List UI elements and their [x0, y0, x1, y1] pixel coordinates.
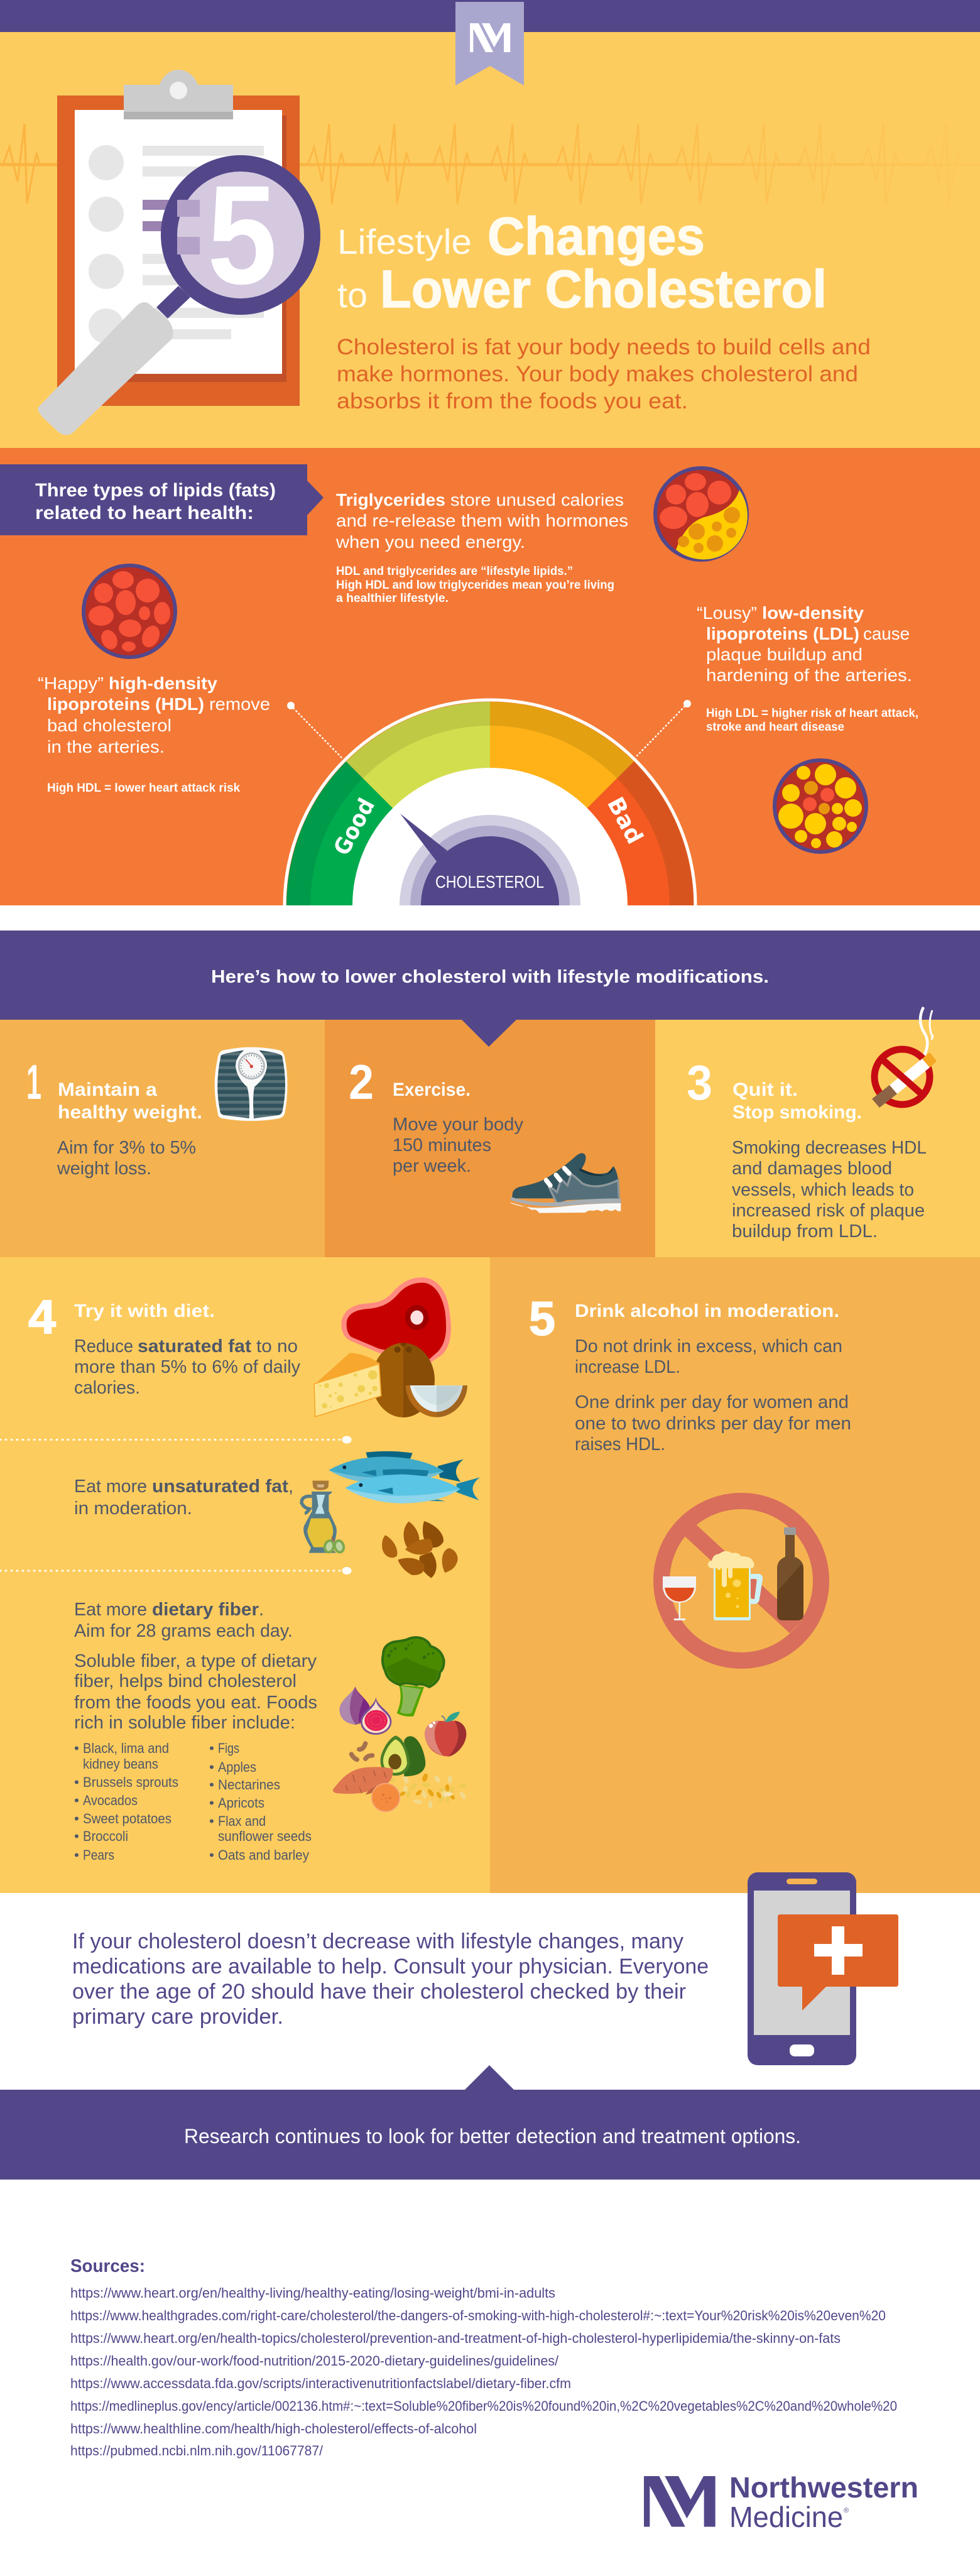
step 3	[687, 1055, 927, 1242]
icon: no alcohol	[662, 1501, 821, 1661]
soluble fiber foods list: Flax and	[218, 1813, 266, 1829]
step 2: per week.	[393, 1156, 471, 1176]
unsaturated fat text: ,	[288, 1476, 293, 1497]
title: to	[337, 275, 368, 315]
step 2: Exercise.	[393, 1079, 471, 1100]
step 3: buildup from LDL.	[732, 1221, 878, 1242]
soluble fiber foods list: Apricots	[218, 1795, 264, 1811]
soluble fiber foods list: •	[74, 1811, 79, 1826]
sources: https://www.heart.org/en/healthy-living/healthy-eating/losing-weight/bmi-in-adults	[70, 2285, 555, 2301]
soluble fiber foods list: Oats and barley	[218, 1847, 310, 1863]
dietary fiber text: Soluble fiber, a type of dietary	[74, 1651, 317, 1671]
step 4 header and text: to no	[256, 1336, 298, 1356]
step 3: Stop smoking.	[732, 1102, 862, 1123]
HDL text: high-density	[109, 674, 218, 693]
step 2: Move your body	[393, 1115, 524, 1135]
intro text: absorbs it from the foods you eat.	[337, 388, 688, 413]
soluble fiber foods list: •	[74, 1847, 79, 1863]
triglycerides text: a healthier lifestyle.	[336, 592, 449, 605]
soluble fiber foods list: sunflower seeds	[218, 1828, 312, 1844]
closing text	[72, 1929, 709, 2029]
closing text: medications are available to help. Consult your physician. Everyone	[72, 1955, 709, 1978]
dietary fiber text: Aim for 28 grams each day.	[74, 1621, 293, 1641]
soluble fiber foods list: Pears	[83, 1847, 114, 1863]
step 5: 5	[529, 1292, 555, 1346]
step 2	[349, 1054, 524, 1176]
flag: three types of lipids: related to heart health:	[35, 503, 254, 523]
dietary fiber text	[74, 1600, 317, 1733]
Northwestern Medicine logo: Medicine	[729, 2501, 843, 2533]
step 2: 2	[349, 1054, 374, 1110]
LDL text: cause	[863, 624, 910, 643]
step 5: Do not drink in excess, which can	[575, 1336, 842, 1356]
divider dots	[0, 1436, 352, 1575]
flag: three types of lipids: Three types of lipids (fats)	[35, 480, 276, 501]
soluble fiber foods list: kidney beans	[83, 1756, 158, 1772]
step 1: Aim for 3% to 5%	[57, 1138, 196, 1158]
dietary fiber text: fiber, helps bind cholesterol	[74, 1671, 297, 1691]
sources: https://medlineplus.gov/ency/article/002136.htm#:~:text=Soluble%20fiber%20is%20found%20in,%2C%20vegetables%2C%20and%20whole%20	[70, 2398, 897, 2414]
step 5	[529, 1292, 851, 1454]
unsaturated fat text	[74, 1476, 293, 1519]
LDL text: plaque buildup and	[706, 645, 863, 664]
banner heading: Here’s how to lower cholesterol with lifestyle modifications.	[211, 967, 769, 987]
HDL text: lipoproteins (HDL)	[47, 694, 204, 714]
triglycerides text: when you need energy.	[335, 532, 525, 552]
Northwestern Medicine logo: ®	[844, 2507, 849, 2514]
soluble fiber foods list: Brussels sprouts	[83, 1774, 178, 1790]
soluble fiber foods list: •	[209, 1777, 214, 1793]
step 4 header and text: saturated fat	[138, 1336, 251, 1356]
sources: https://www.heart.org/en/health-topics/cholesterol/prevention-and-treatment-of-high-cholesterol-hyperlipidemia/the-skinny-on-fats	[70, 2330, 841, 2346]
intro text: make hormones. Your body makes cholesterol and	[337, 361, 858, 386]
soluble fiber foods list: Nectarines	[218, 1777, 280, 1793]
soluble fiber foods list: •	[74, 1774, 79, 1790]
LDL text: High LDL = higher risk of heart attack,	[706, 707, 918, 720]
sources: Sources:	[70, 2256, 145, 2276]
step 1: healthy weight.	[58, 1102, 202, 1123]
step 4 header and text	[28, 1291, 300, 1398]
intro text	[337, 334, 871, 413]
soluble fiber foods list: Figs	[218, 1740, 239, 1756]
icon: HDL artery	[84, 565, 175, 657]
soluble fiber foods list: •	[209, 1759, 214, 1775]
cholesterol gauge: Bad	[602, 793, 648, 848]
sources	[70, 2256, 897, 2459]
LDL text: hardening of the arteries.	[706, 665, 912, 685]
cholesterol gauge: Good	[329, 794, 380, 860]
icon: fish, oil and almonds	[302, 1451, 480, 1578]
title	[337, 207, 827, 319]
soluble fiber foods list: Broccoli	[83, 1828, 128, 1844]
sources: https://pubmed.ncbi.nlm.nih.gov/11067787/	[70, 2443, 324, 2459]
triglycerides text: Triglycerides	[336, 490, 445, 510]
ribbon logo	[455, 2, 524, 85]
icon: shoe	[511, 1153, 621, 1213]
title: Changes	[487, 207, 705, 266]
soluble fiber foods list: Avocados	[83, 1793, 138, 1808]
soluble fiber foods list: •	[209, 1795, 214, 1811]
step 4 header and text: calories.	[74, 1378, 140, 1398]
icon: bathroom scale	[215, 1047, 287, 1121]
title: Lifestyle	[337, 222, 472, 261]
step 3: and damages blood	[732, 1159, 892, 1179]
HDL text: High HDL = lower heart attack risk	[47, 782, 240, 795]
triglycerides text: HDL and triglycerides are “lifestyle lipids.”	[336, 565, 573, 578]
dietary fiber text: Eat more	[74, 1600, 147, 1620]
step 4 header and text: Try it with diet.	[74, 1301, 215, 1321]
soluble fiber foods list: •	[74, 1828, 79, 1844]
triglycerides text: store unused calories	[450, 490, 624, 510]
step 4 header and text: 4	[28, 1291, 56, 1344]
soluble fiber foods list: Sweet potatoes	[83, 1811, 172, 1826]
step 1	[26, 1054, 202, 1179]
HDL text: in the arteries.	[47, 737, 165, 756]
HDL text: “Happy”	[38, 674, 104, 693]
icon: high fiber foods	[333, 1637, 467, 1811]
icon: meat, cheese and coconut	[314, 1277, 467, 1417]
icon: LDL artery	[775, 760, 866, 852]
icon: clipboard with magnifier: 5	[207, 156, 277, 314]
step 5: One drink per day for women and	[575, 1392, 849, 1412]
LDL text: “Lousy”	[697, 603, 757, 623]
HDL text: remove	[209, 694, 270, 714]
dietary fiber text: .	[259, 1600, 264, 1620]
LDL text: low-density	[762, 603, 864, 623]
step 3: Quit it.	[732, 1079, 798, 1100]
dietary fiber text: rich in soluble fiber include:	[74, 1713, 295, 1733]
step 1: weight loss.	[57, 1159, 151, 1179]
title: Lower Cholesterol	[380, 259, 827, 319]
cholesterol gauge: CHOLESTEROL	[435, 872, 544, 892]
triglycerides text	[335, 490, 628, 605]
LDL text	[697, 603, 918, 734]
step 3: vessels, which leads to	[732, 1180, 914, 1200]
LDL text: lipoproteins (LDL)	[706, 624, 859, 643]
footer banner arrow	[465, 2065, 514, 2090]
unsaturated fat text: in moderation.	[74, 1498, 192, 1519]
unsaturated fat text: unsaturated fat	[152, 1476, 288, 1497]
unsaturated fat text: Eat more	[74, 1476, 147, 1497]
heartbeat line	[0, 124, 980, 204]
cholesterol gauge	[285, 700, 695, 905]
soluble fiber foods list	[74, 1740, 312, 1863]
step 4 header and text: Reduce	[74, 1336, 133, 1356]
callout pointers	[287, 700, 691, 758]
soluble fiber foods list: Black, lima and	[83, 1740, 169, 1756]
step 3: Smoking decreases HDL	[732, 1138, 927, 1158]
banner arrow	[462, 1020, 516, 1047]
sources: https://www.healthline.com/health/high-cholesterol/effects-of-alcohol	[70, 2421, 477, 2437]
step 5: raises HDL.	[575, 1434, 665, 1454]
research text: Research continues to look for better detection and treatment options.	[184, 2125, 801, 2148]
icon: phone with medical message	[748, 1872, 898, 2065]
icon: clipboard with magnifier	[38, 70, 312, 435]
step 5: Drink alcohol in moderation.	[575, 1301, 839, 1321]
flag: three types of lipids	[0, 464, 324, 535]
sources: https://health.gov/our-work/food-nutrition/2015-2020-dietary-guidelines/guidelines/	[70, 2353, 559, 2369]
soluble fiber foods list: •	[74, 1740, 79, 1756]
intro text: Cholesterol is fat your body needs to build cells and	[337, 334, 871, 359]
closing text: primary care provider.	[72, 2005, 283, 2029]
step 1: Maintain a	[58, 1079, 157, 1100]
soluble fiber foods list: •	[74, 1793, 79, 1808]
step 1: 1	[26, 1054, 41, 1110]
dietary fiber text: dietary fiber	[152, 1600, 259, 1620]
Northwestern Medicine logo	[644, 2471, 918, 2533]
soluble fiber foods list: •	[209, 1813, 214, 1829]
sources: https://www.healthgrades.com/right-care/cholesterol/the-dangers-of-smoking-with-high-cholesterol#:~:text=Your%20risk%20is%20even%20	[70, 2308, 886, 2323]
closing text: over the age of 20 should have their cholesterol checked by their	[72, 1980, 686, 2004]
soluble fiber foods list: Apples	[218, 1759, 256, 1775]
step 3: 3	[687, 1055, 712, 1110]
step 3: increased risk of plaque	[732, 1201, 925, 1221]
step 5: increase LDL.	[575, 1357, 680, 1377]
triglycerides text: High HDL and low triglycerides mean you’re living	[336, 579, 614, 592]
step 4 header and text: more than 5% to 6% of daily	[74, 1357, 300, 1377]
icon: triglycerides artery	[655, 468, 748, 560]
Northwestern Medicine logo: Northwestern	[729, 2471, 918, 2504]
HDL text: bad cholesterol	[47, 716, 172, 735]
soluble fiber foods list: •	[209, 1740, 214, 1756]
HDL text	[38, 674, 270, 795]
triglycerides text: and re-release them with hormones	[336, 511, 628, 530]
icon: no smoking	[872, 1007, 937, 1108]
closing text: If your cholesterol doesn’t decrease with lifestyle changes, many	[72, 1929, 684, 1953]
step 5: one to two drinks per day for men	[575, 1414, 851, 1434]
sources: https://www.accessdata.fda.gov/scripts/interactivenutritionfactslabel/dietary-fiber.cfm	[70, 2376, 571, 2391]
LDL text: stroke and heart disease	[706, 721, 844, 734]
step 2: 150 minutes	[393, 1135, 491, 1155]
dietary fiber text: from the foods you eat. Foods	[74, 1693, 317, 1713]
soluble fiber foods list: •	[209, 1847, 214, 1863]
